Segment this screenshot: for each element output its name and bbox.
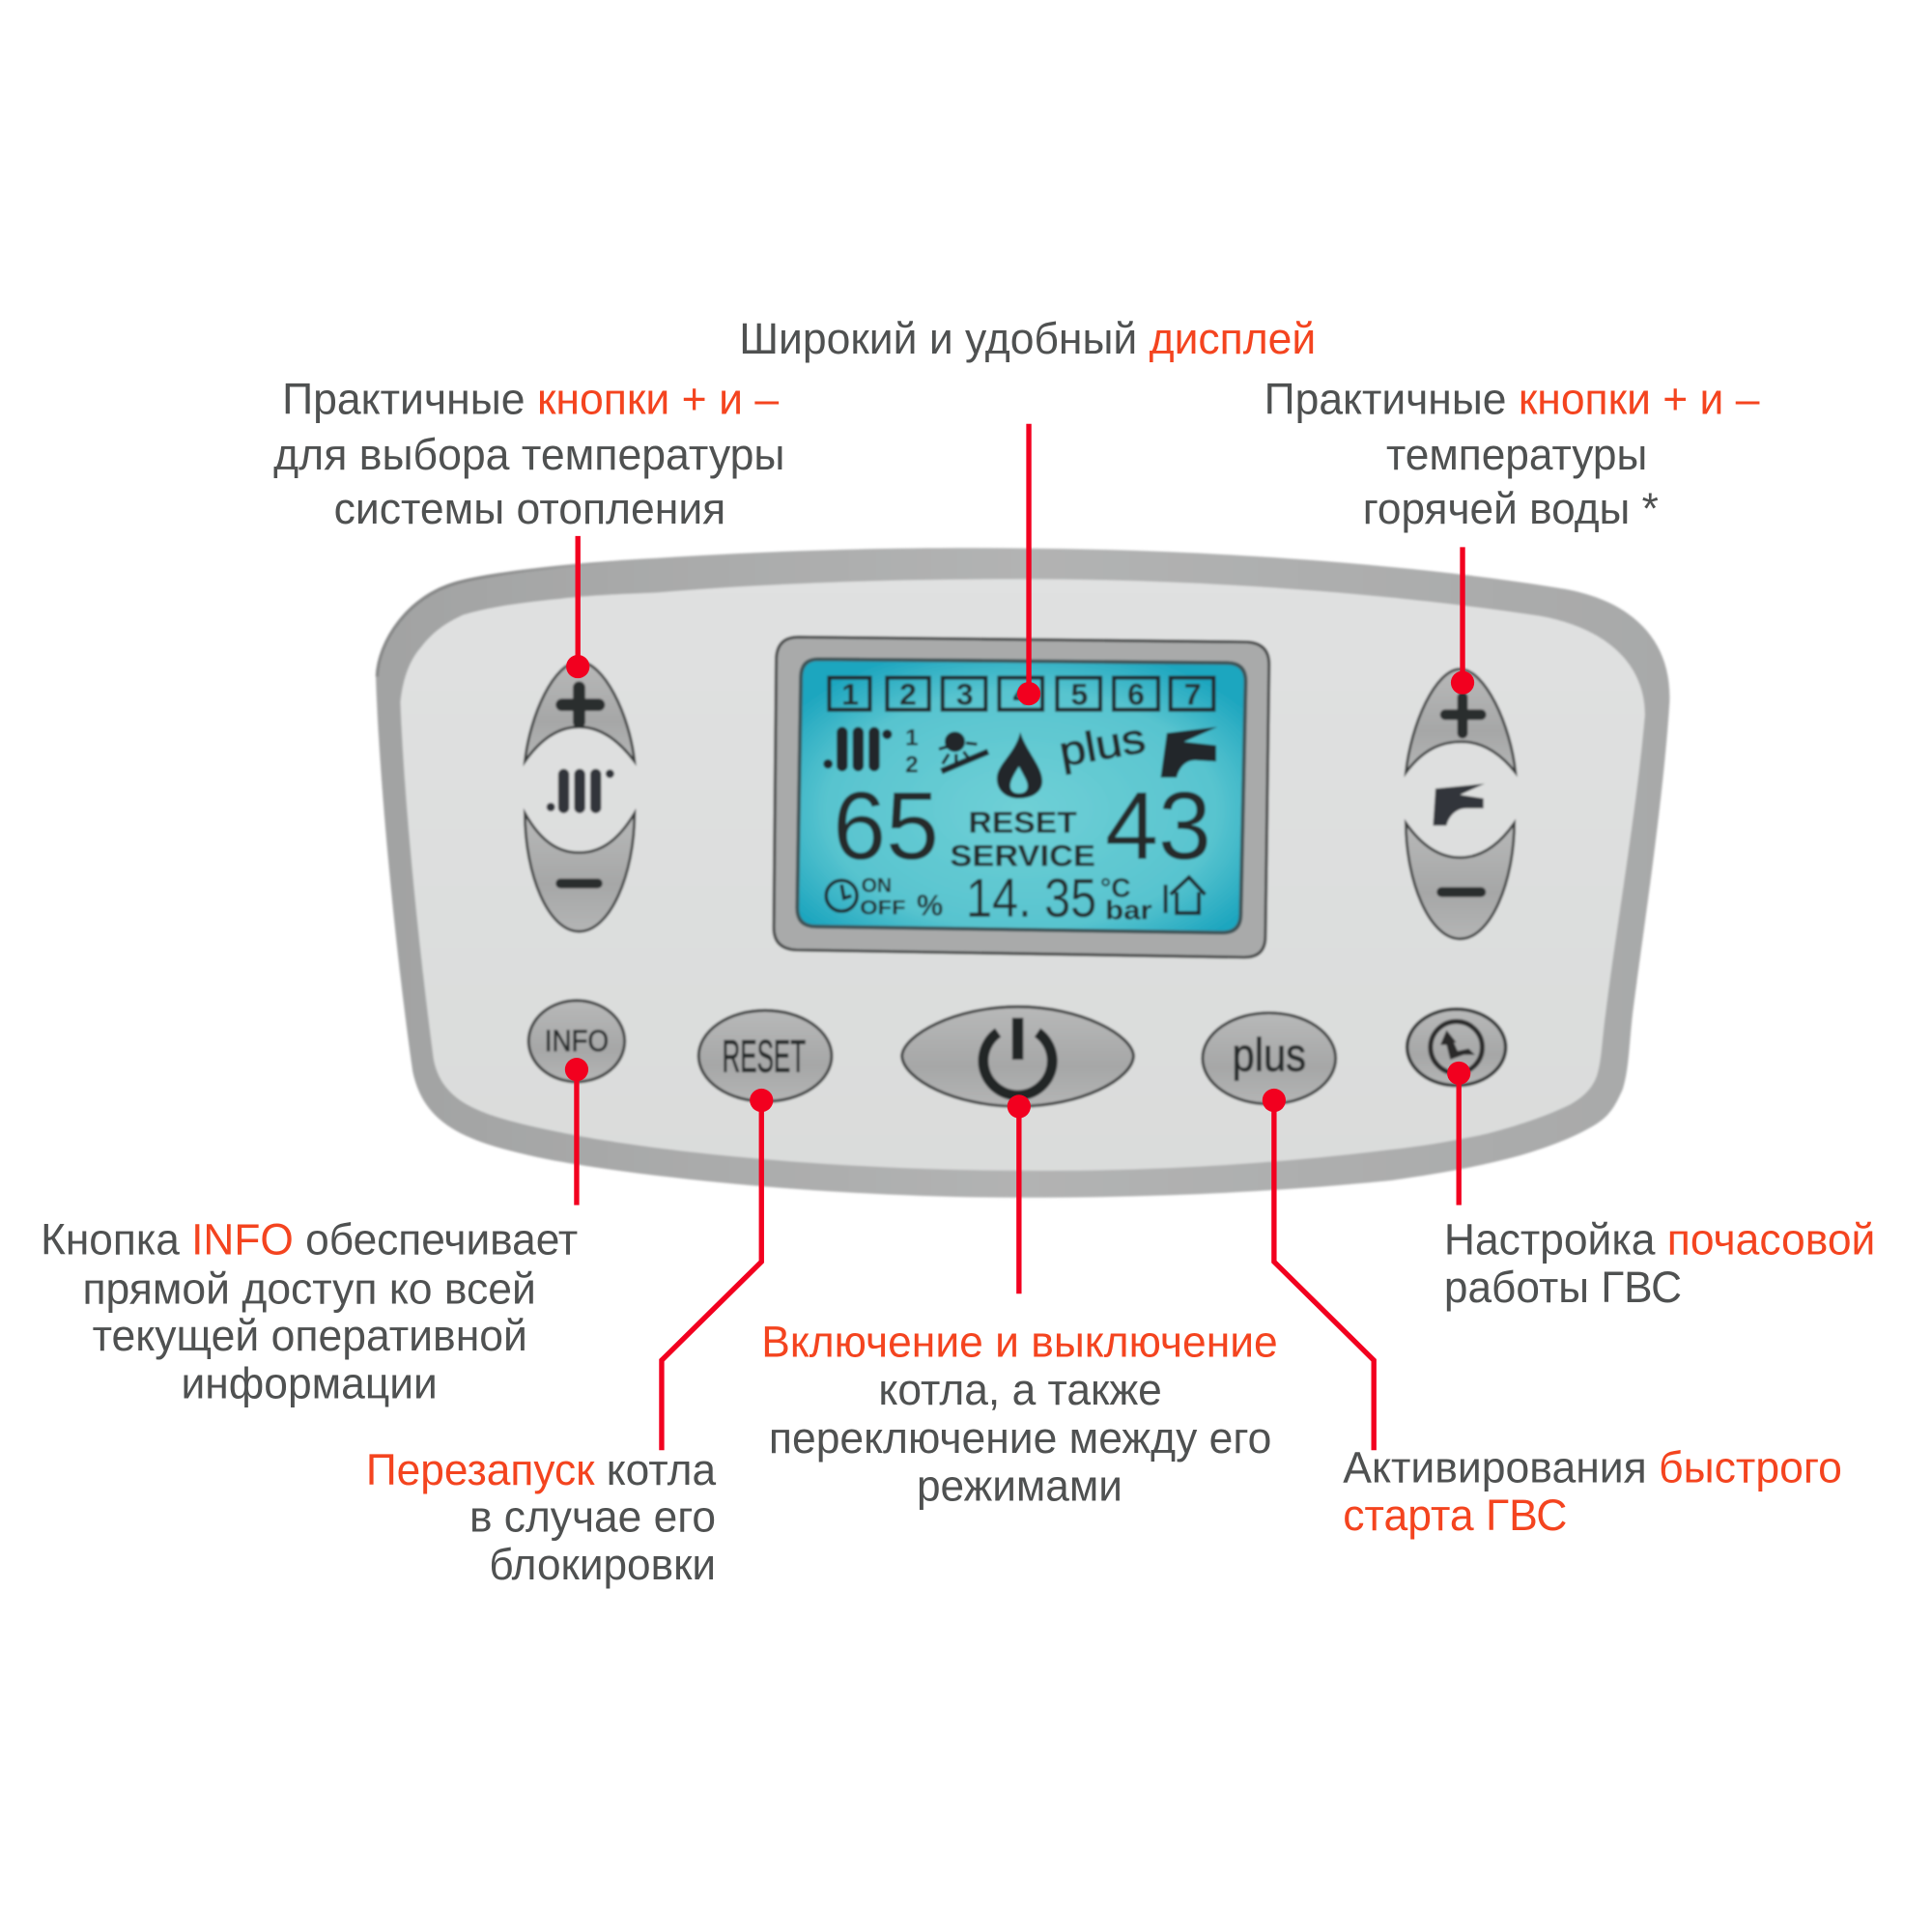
RESET button: RESET — [722, 1032, 806, 1083]
LCD units — [1100, 873, 1152, 925]
LCD day boxes 1 to 7: 4 — [1013, 677, 1031, 712]
LCD day boxes 1 to 7: 3 — [956, 677, 974, 712]
RESET button — [698, 1010, 832, 1101]
left plus key — [525, 662, 635, 761]
text: INFO caption — [41, 1214, 578, 1408]
text: left plus minus caption: для выбора температуры — [273, 430, 784, 479]
right plus sign — [1445, 697, 1481, 733]
LCD heating temperature 65: 65 — [833, 773, 939, 880]
callout line: RESET button — [662, 1089, 773, 1450]
LCD day boxes 1 to 7: 2 — [899, 677, 917, 712]
power button — [902, 1007, 1133, 1106]
callout line: INFO button — [565, 1058, 588, 1205]
left plus sign — [562, 688, 599, 722]
LCD hot water temperature 43: 43 — [1105, 773, 1211, 880]
text: plus caption — [1343, 1442, 1842, 1540]
text: INFO caption: информации — [182, 1359, 438, 1408]
callout line: power button — [1008, 1094, 1031, 1293]
LCD status RESET and SERVICE — [950, 805, 1095, 873]
panel top edge shading — [377, 559, 657, 676]
LCD day boxes 1 to 7 — [829, 677, 1213, 712]
text: plus caption: старта ГВС — [1343, 1491, 1567, 1540]
LCD circuit numbers: 1 — [905, 725, 919, 752]
text: display caption: Широкий и удобный дисплей — [739, 314, 1316, 363]
LCD percent sign: % — [917, 890, 943, 923]
text: left plus minus caption — [273, 375, 784, 533]
text: power caption: Включение и выключение — [761, 1317, 1278, 1366]
text: power caption: режимами — [917, 1462, 1122, 1511]
LCD flame icon — [997, 732, 1042, 799]
INFO button — [528, 1001, 625, 1082]
callout line: display — [1017, 424, 1040, 705]
text: RESET caption: в случае его — [469, 1492, 716, 1541]
LCD day boxes 1 to 7: 1 — [841, 677, 859, 712]
LCD units: bar — [1105, 895, 1152, 925]
clock programming button — [1407, 1009, 1506, 1086]
text: left plus minus caption: системы отопления — [334, 484, 725, 533]
LCD house icon — [1166, 877, 1205, 913]
text: INFO caption: прямой доступ ко всей — [82, 1264, 536, 1313]
LCD radiator icon — [823, 727, 892, 771]
control panel body — [376, 548, 1669, 1198]
LCD screen — [797, 659, 1246, 933]
text: plus caption: Активирования быстрого — [1343, 1442, 1842, 1492]
LCD tap icon — [1161, 727, 1217, 778]
callout line: right plus button — [1451, 547, 1474, 695]
panel outer frame — [376, 548, 1669, 1198]
LCD on and off labels — [860, 874, 906, 919]
LCD day boxes 1 to 7: 6 — [1127, 677, 1145, 712]
text: RESET caption — [366, 1445, 717, 1589]
text: power caption: переключение между его — [769, 1413, 1271, 1463]
text: right plus minus caption: горячей воды * — [1363, 484, 1659, 533]
callout line: clock button — [1447, 1062, 1470, 1205]
LCD value 14.35: 14. 35 — [966, 867, 1096, 928]
INFO button: INFO — [545, 1023, 609, 1058]
LCD status RESET and SERVICE: RESET — [969, 805, 1077, 839]
text: power caption: котла, а также — [878, 1365, 1162, 1414]
text: INFO caption: текущей оперативной — [93, 1311, 527, 1360]
text: INFO caption: Кнопка INFO обеспечивает — [41, 1214, 578, 1264]
text: left plus minus caption: Практичные кнопки + и – — [282, 375, 780, 424]
left minus key — [525, 813, 635, 931]
LCD units: °C — [1100, 873, 1131, 903]
LCD day boxes 1 to 7: 7 — [1184, 677, 1202, 712]
left minus sign — [560, 880, 598, 888]
text: RESET caption: Перезапуск котла — [366, 1445, 717, 1494]
text: clock caption — [1444, 1214, 1875, 1312]
right minus sign — [1441, 888, 1481, 895]
LCD status RESET and SERVICE: SERVICE — [950, 838, 1095, 873]
right plus key — [1406, 669, 1516, 773]
plus button — [1203, 1012, 1336, 1104]
LCD circuit numbers: 2 — [905, 753, 919, 779]
display bezel — [774, 637, 1269, 957]
power symbol — [983, 1018, 1052, 1095]
plus button: plus — [1233, 1029, 1306, 1081]
LCD plus label: plus — [1056, 715, 1149, 776]
right minus key — [1406, 823, 1515, 939]
panel inner face — [401, 579, 1645, 1171]
text: right plus minus caption: Практичные кнопки + и – — [1264, 375, 1760, 424]
button: left plus/minus heating rocker — [525, 662, 635, 931]
text: power caption — [761, 1317, 1278, 1511]
text: right plus minus caption: температуры — [1386, 430, 1647, 479]
callout line: plus button — [1263, 1089, 1374, 1450]
text: RESET caption: блокировки — [489, 1540, 716, 1589]
left radiator icon — [547, 769, 614, 813]
LCD clock icon — [826, 880, 857, 911]
LCD day boxes 1 to 7: 5 — [1070, 677, 1088, 712]
LCD circuit numbers — [905, 725, 919, 779]
text: clock caption: работы ГВС — [1444, 1263, 1682, 1312]
LCD on and off labels: ON — [862, 874, 892, 896]
text: right plus minus caption — [1264, 375, 1760, 533]
text: clock caption: Настройка почасовой — [1444, 1214, 1875, 1264]
button: right plus/minus hot water rocker — [1406, 669, 1516, 939]
right tap icon — [1433, 783, 1485, 826]
callout line: left plus button — [566, 536, 589, 678]
LCD on and off labels: OFF — [860, 896, 906, 919]
LCD sun icon — [939, 733, 988, 771]
